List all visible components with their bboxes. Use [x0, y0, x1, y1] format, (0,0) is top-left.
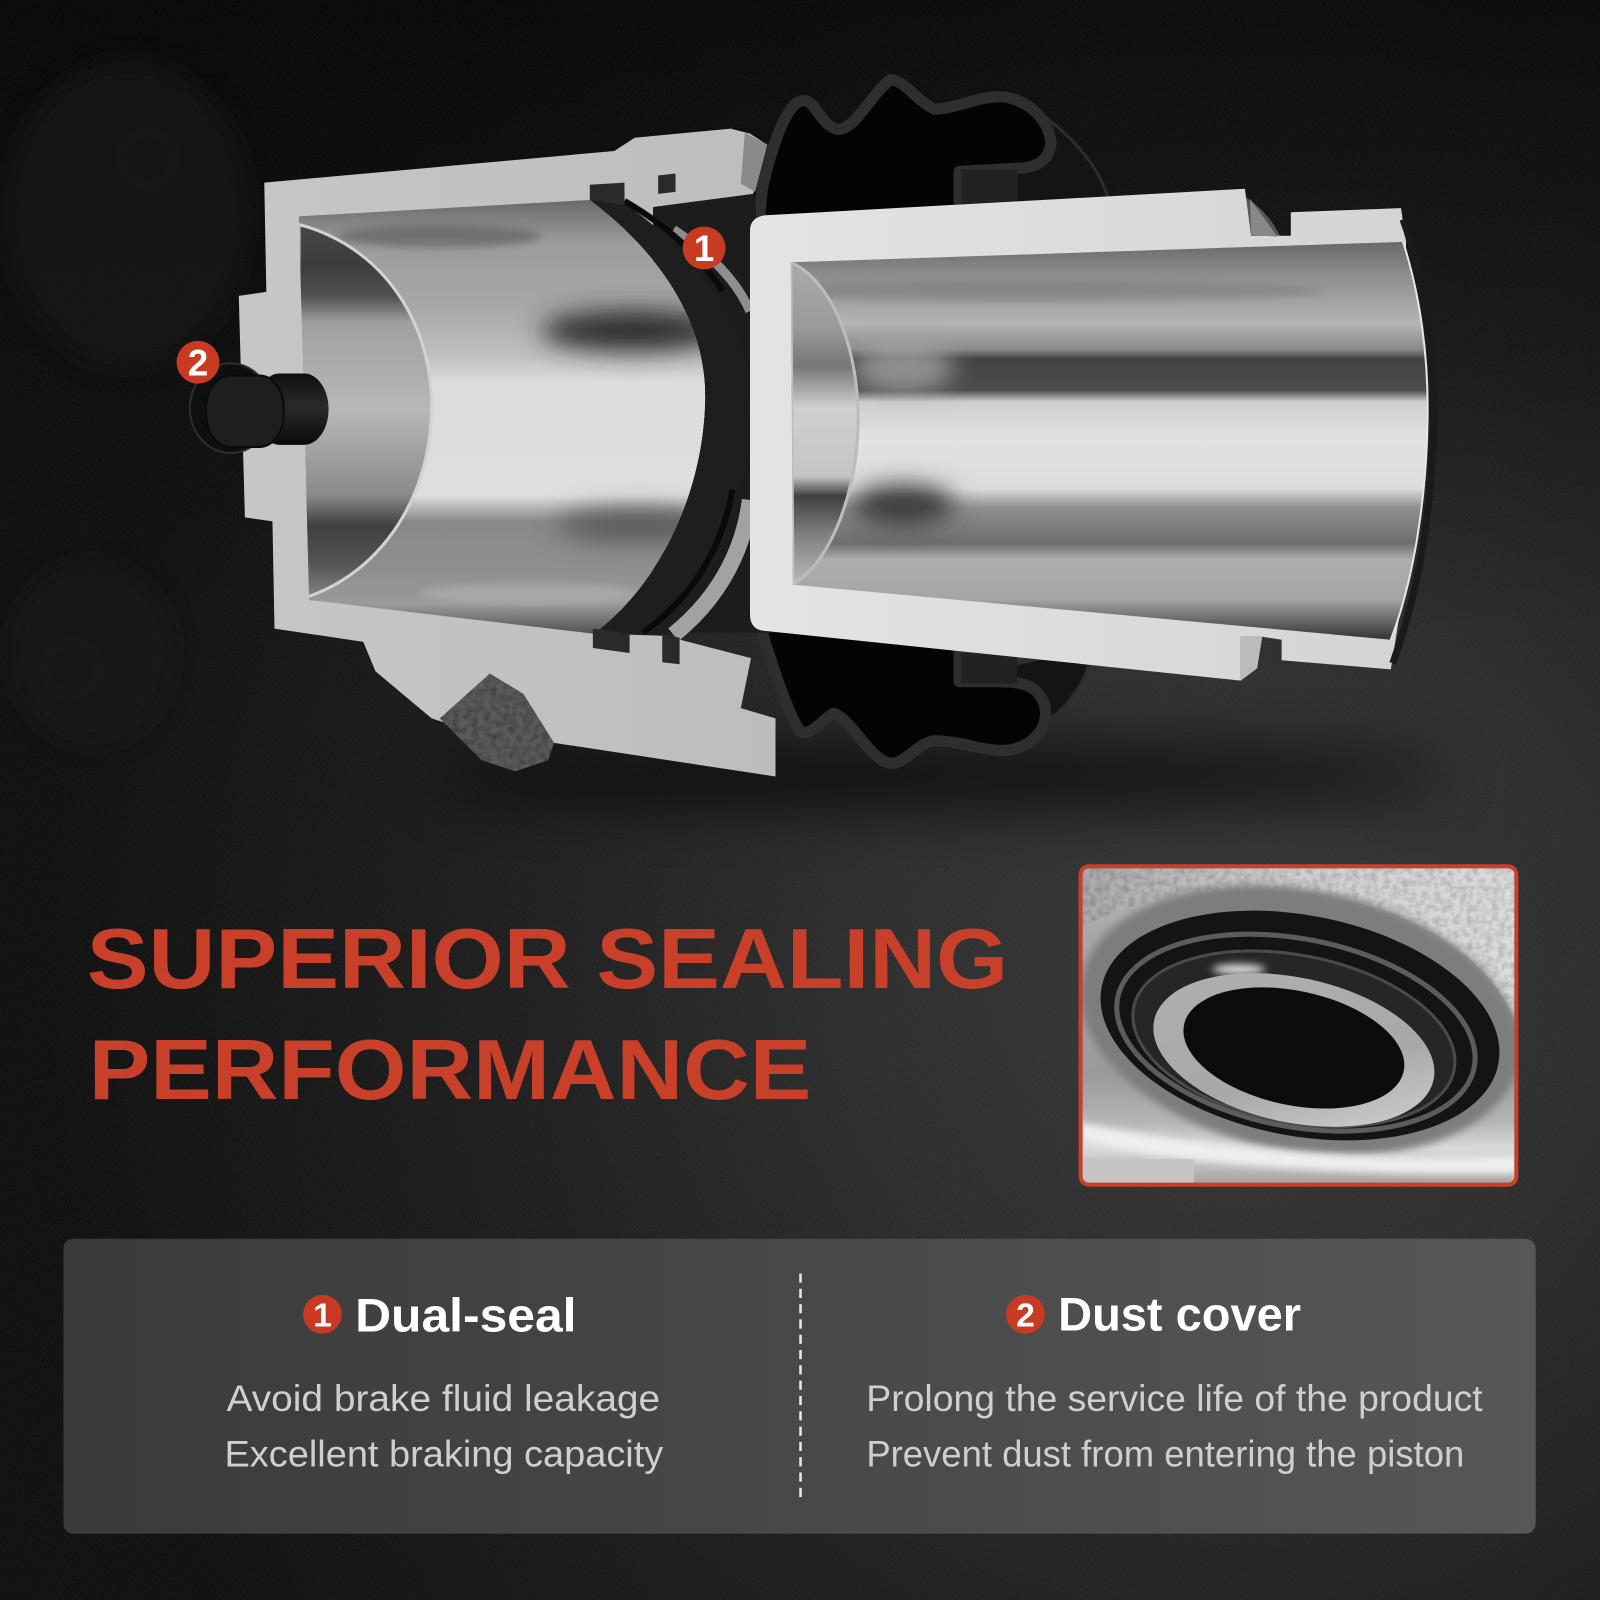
title	[87, 911, 1008, 1118]
faint caliper silhouette	[5, 61, 250, 745]
info panel	[63, 1239, 1536, 1534]
description: dust cover: Prevent dust from entering the piston	[866, 1433, 1464, 1474]
description: dual-seal: Excellent braking capacity	[224, 1433, 664, 1474]
right cavity	[790, 242, 1429, 640]
shadow under piston	[429, 747, 1449, 804]
right rim	[1393, 219, 1434, 663]
dust cover pin	[190, 363, 329, 453]
column: dual-seal	[224, 1290, 664, 1474]
badge 2: 2	[1016, 1298, 1035, 1335]
badge 2 on pin	[177, 341, 219, 384]
badge 2 on pin: 2	[188, 343, 208, 384]
dark inner bore	[653, 194, 776, 633]
heading: dust cover: Dust cover	[1058, 1289, 1301, 1341]
piston and caliper cutaway	[239, 80, 1434, 777]
badge 1 on seal	[683, 227, 726, 269]
badge 2	[1006, 1295, 1045, 1335]
right piston body	[714, 189, 1434, 681]
dust boot	[755, 80, 1108, 763]
seal rings	[590, 173, 750, 664]
title: SUPERIOR SEALING	[87, 911, 1008, 1007]
rough cast surface	[434, 133, 767, 776]
column: dust cover	[866, 1289, 1483, 1474]
title: PERFORMANCE	[89, 1022, 811, 1118]
badge 1: 1	[313, 1298, 332, 1335]
description: dual-seal: Avoid brake fluid leakage	[227, 1378, 660, 1419]
badge 1	[303, 1295, 342, 1335]
piston end cap	[299, 224, 432, 597]
inset photo: dust cover close-up	[1057, 850, 1543, 1191]
description: dust cover	[866, 1378, 1483, 1474]
left cavity	[299, 200, 724, 634]
badge 1 on seal: 1	[694, 228, 714, 269]
caliper housing	[239, 129, 776, 777]
description: dual-seal	[224, 1378, 664, 1474]
heading: dual-seal: Dual-seal	[355, 1290, 577, 1342]
description: dust cover: Prolong the service life of the product	[866, 1378, 1483, 1419]
